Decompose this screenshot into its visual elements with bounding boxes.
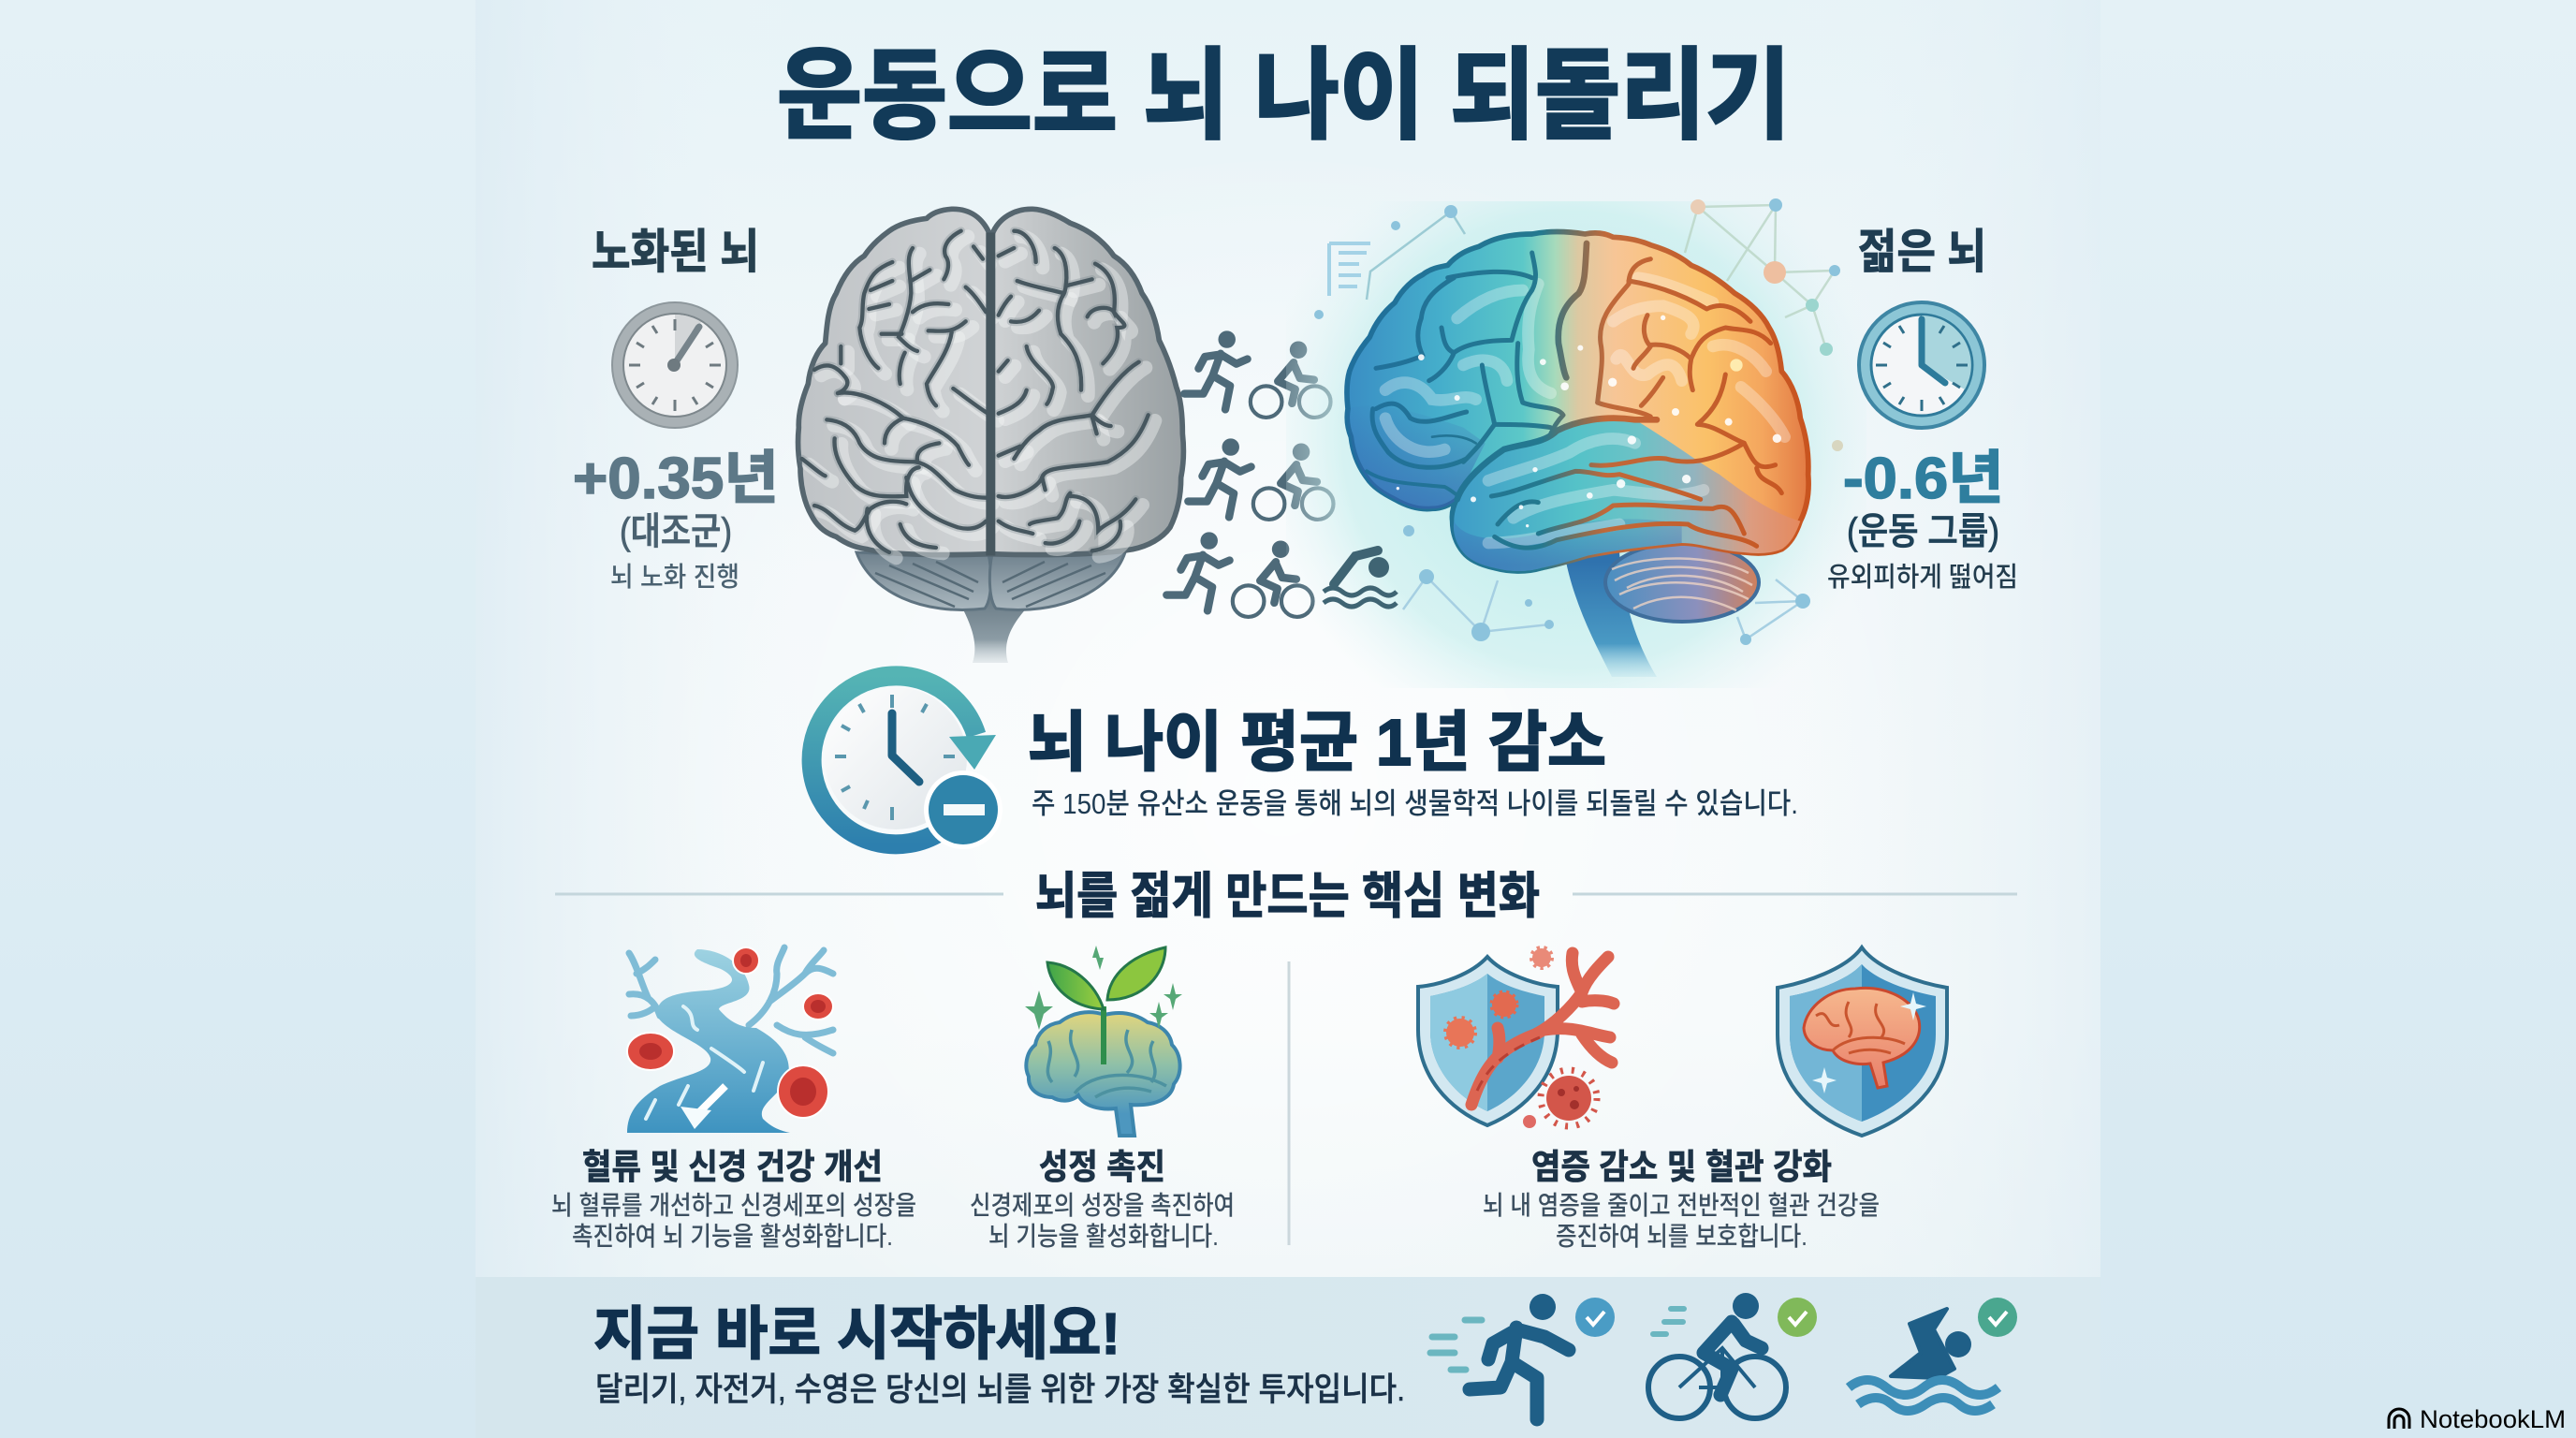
description: 신경제포의 성장을 촉진하여	[970, 1191, 1235, 1220]
label: exercise group: (운동 그룹)	[1847, 511, 1999, 552]
icon: swimmer	[1324, 550, 1397, 607]
card: inflammation and vascular	[1418, 947, 1947, 1251]
note: brain aging progresses: 뇌 노화 진행	[610, 562, 739, 593]
icon: runner 2	[1188, 438, 1251, 517]
icon: swimmer with check	[1849, 1298, 2017, 1411]
heading: brain age down one year: 뇌 나이 평균 1년 감소	[1028, 706, 1606, 779]
heading: 염증 감소 및 혈관 강화	[1531, 1148, 1832, 1186]
illustration: young colorful brain	[1286, 198, 1866, 688]
heading: 혈류 및 신경 건강 개선	[582, 1148, 883, 1186]
card: blood flow and nerve health	[551, 947, 916, 1251]
title: 운동으로 뇌 나이 되돌리기	[777, 41, 1791, 152]
network lines	[1314, 198, 1843, 645]
stat: +0.35 years: +0.35년	[573, 447, 779, 511]
icon: blood vessel river with red cells	[627, 947, 833, 1133]
icon: cyclist 3	[1233, 540, 1313, 617]
icon: cyclist 2	[1253, 443, 1334, 520]
heading: 성정 촉진	[1039, 1148, 1165, 1186]
sulci	[1367, 243, 1781, 548]
heading: young brain: 젊은 뇌	[1858, 226, 1986, 278]
panel: aged brain stats	[573, 226, 779, 593]
icon: runner 3	[1166, 532, 1230, 610]
icon: gray clock	[612, 302, 738, 428]
icon: teal clock	[1859, 302, 1984, 428]
card: growth promotion	[970, 946, 1235, 1251]
icon: shield with vessel and viruses	[1418, 948, 1614, 1128]
note: significantly decreased: 유외피하게 떮어짐	[1827, 562, 2018, 593]
icon: cyclist with check	[1648, 1293, 1817, 1418]
heading: start now: 지금 바로 시작하세요!	[593, 1302, 1120, 1367]
text: 150 minutes explanation: 주 150분 유산소 운동을 통해 뇌의 생물학적 나이를 되돌릴 수 있습니다.	[1032, 787, 1798, 820]
icon: sprout on brain	[1025, 946, 1182, 1136]
description line 2: 뇌 기능을 활성화합니다.	[988, 1222, 1219, 1251]
label: control group: (대조군)	[620, 511, 732, 552]
description line 2: 증진하여 뇌를 보호합니다.	[1556, 1222, 1808, 1251]
icons: exercise figures	[1166, 330, 1334, 617]
panel: young brain stats	[1827, 226, 2018, 593]
sparkles	[1397, 315, 1781, 527]
heading: key changes section: 뇌를 젊게 만드는 핵심 변화	[1035, 869, 1540, 924]
heading: aged brain: 노화된 뇌	[592, 226, 759, 278]
panel: key result	[812, 676, 1798, 849]
stat: -0.6 years: -0.6년	[1843, 447, 2004, 511]
panel: call to action band	[476, 1277, 2100, 1438]
icon: shield with brain	[1778, 947, 1947, 1136]
description: 뇌 내 염증을 줄이고 전반적인 혈관 건강을	[1483, 1191, 1880, 1220]
description: 뇌 혈류를 개선하고 신경세포의 성장을	[551, 1191, 916, 1220]
text: investment statement: 달리기, 자전거, 수영은 당신의 뇌를 위한 가장 확실한 투자입니다.	[595, 1372, 1405, 1408]
illustration: aged gray brain	[798, 209, 1183, 663]
icon: clock turning back with minus	[812, 676, 1003, 849]
icon: runner with check	[1430, 1294, 1615, 1419]
icon: cyclist 1	[1251, 341, 1331, 418]
highlights	[1385, 278, 1785, 543]
icon: runner 1	[1184, 330, 1248, 409]
logo: NotebookLM: NotebookLM	[2420, 1405, 2566, 1433]
description line 2: 촉진하여 뇌 기능을 활성화합니다.	[572, 1222, 893, 1251]
